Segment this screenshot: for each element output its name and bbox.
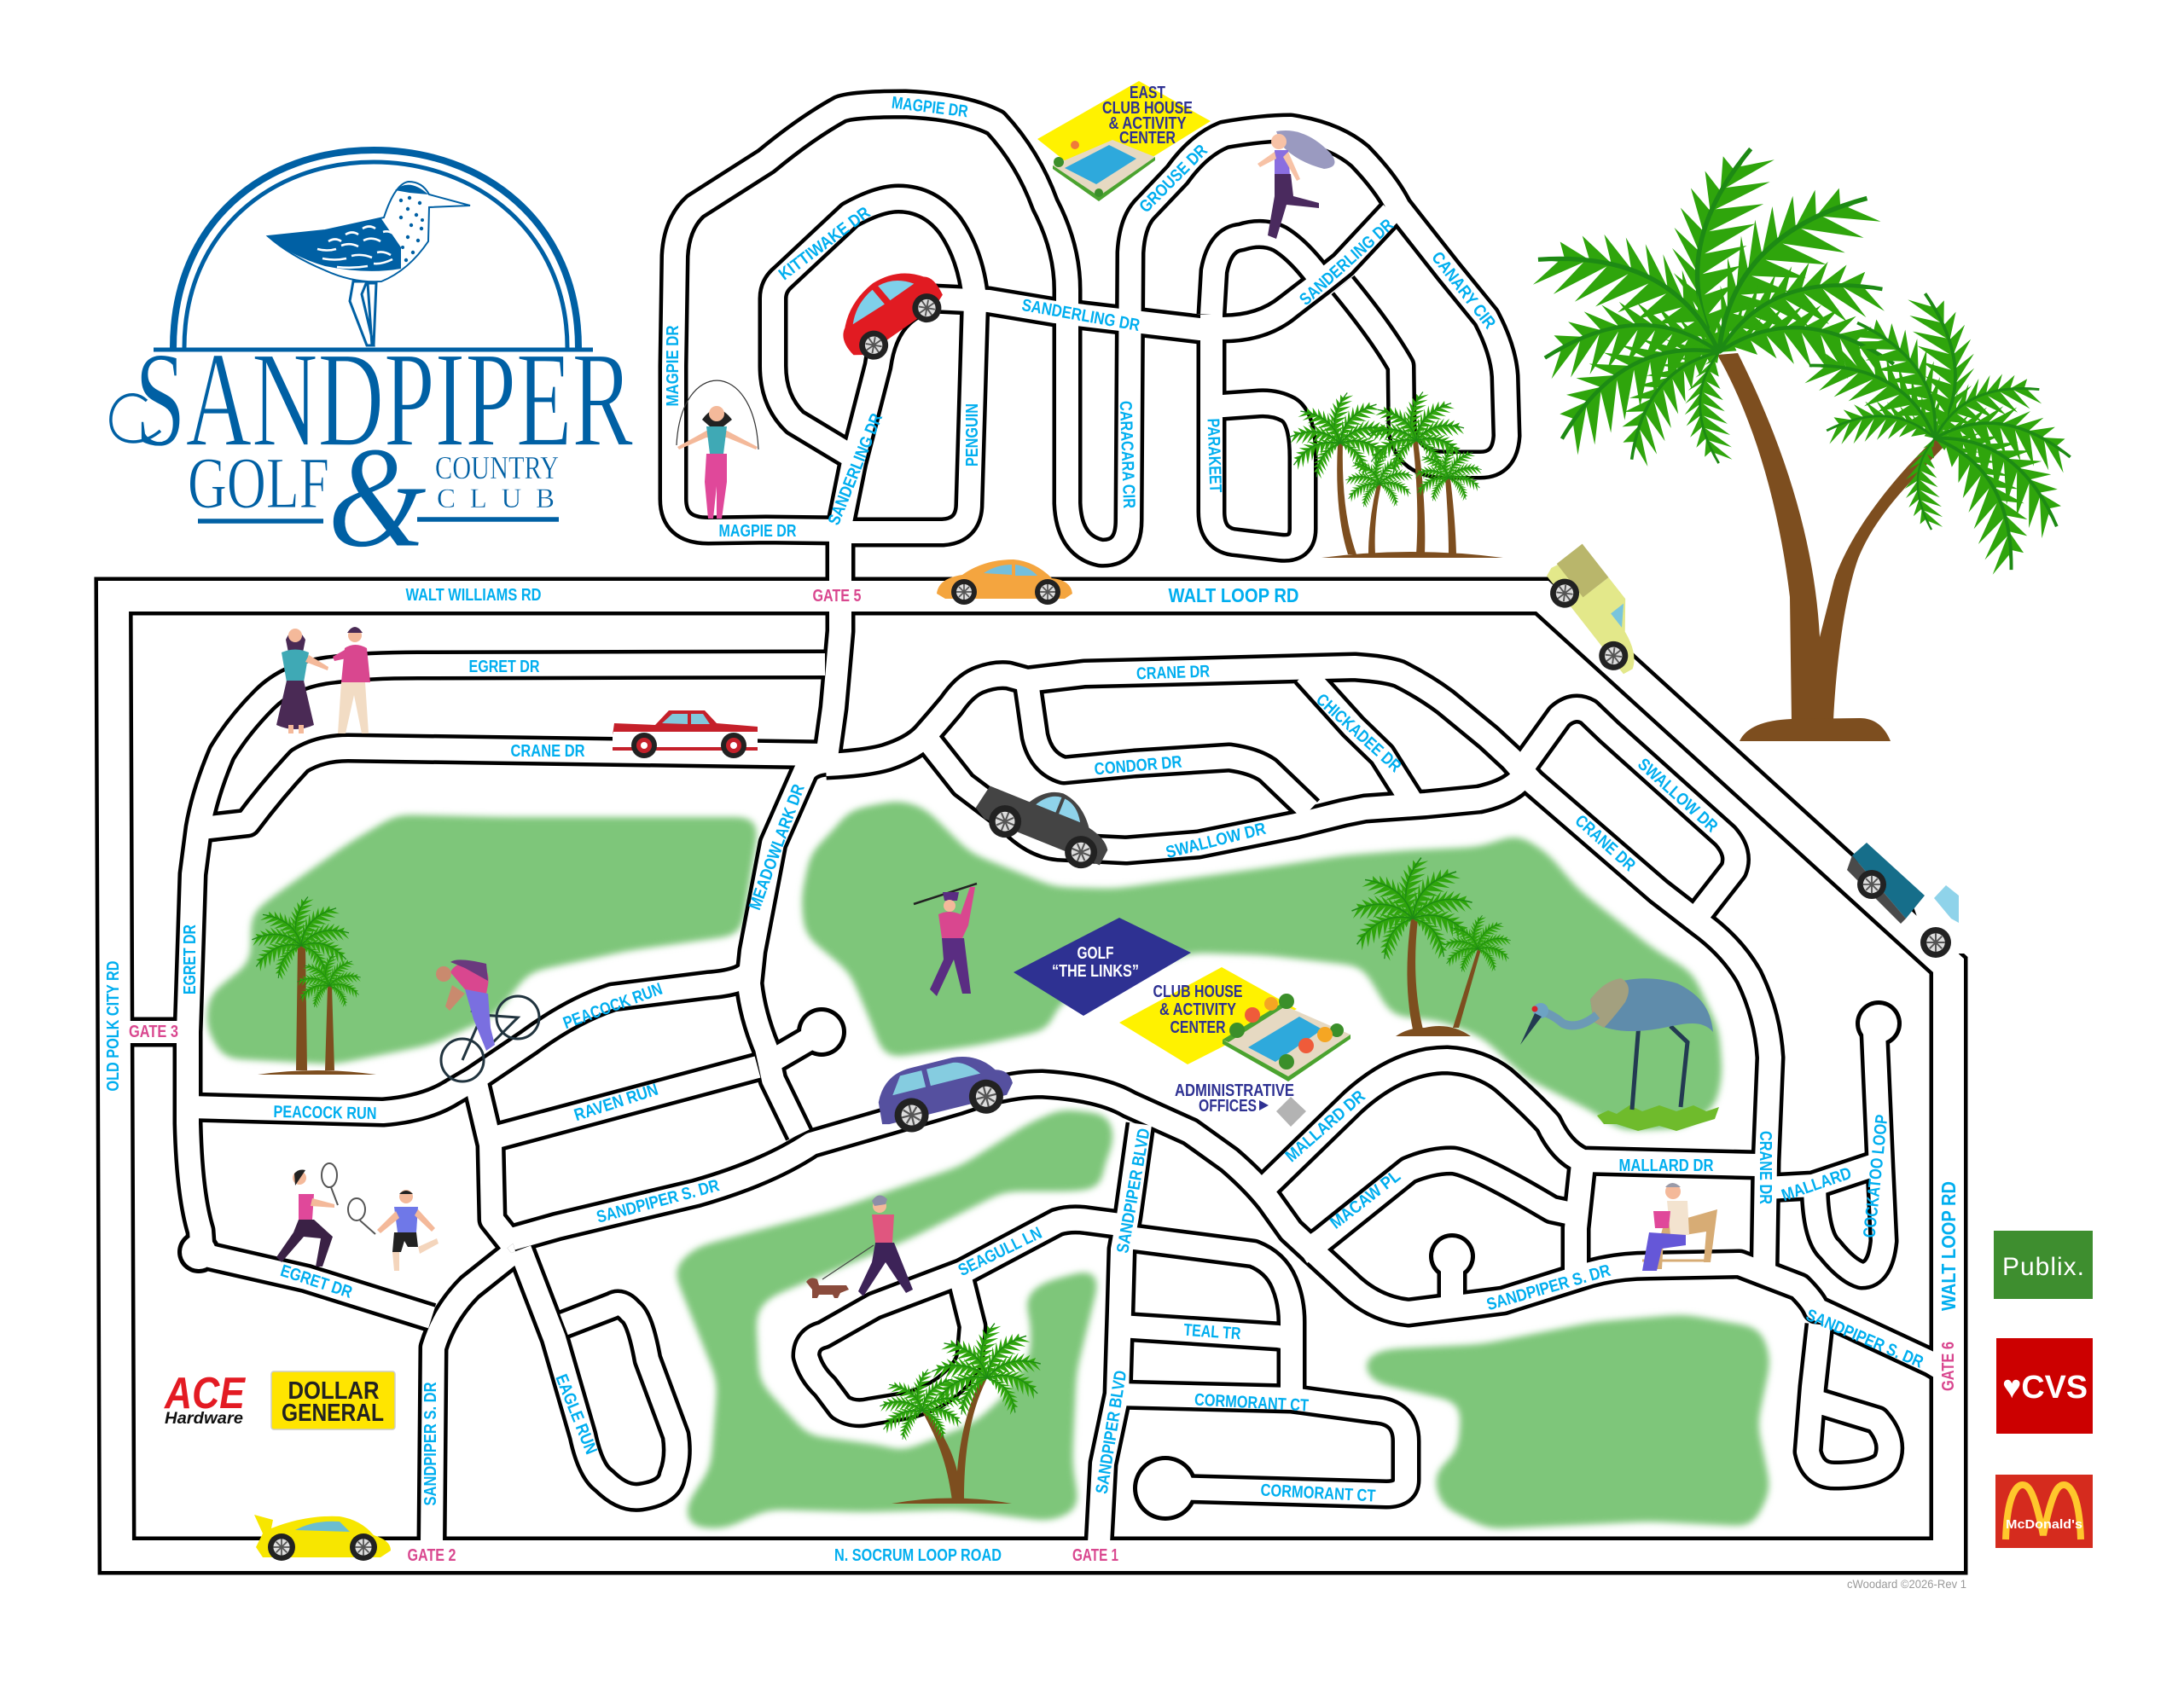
logo: Dollar General: GENERAL bbox=[282, 1400, 384, 1427]
east club house sign bbox=[1037, 81, 1211, 201]
pool bbox=[1223, 994, 1350, 1081]
logo: CVS bbox=[1996, 1338, 2093, 1434]
street labels: PEACOCK RUN bbox=[273, 1103, 377, 1123]
vehicle: red hatchback bbox=[826, 254, 953, 370]
street labels: SANDERLING DR bbox=[1296, 215, 1397, 310]
street labels: SWALLOW DR bbox=[1164, 820, 1269, 862]
palm mound bbox=[1740, 718, 1891, 741]
logo: CVS: ♥CVS bbox=[2002, 1370, 2088, 1406]
street labels: WALT LOOP RD bbox=[1937, 1181, 1960, 1311]
person: golfer bbox=[914, 884, 977, 996]
administrative offices: OFFICES bbox=[1199, 1097, 1257, 1116]
golf course green areas bbox=[206, 800, 1771, 1529]
street labels: SWALLOW DR bbox=[1634, 755, 1722, 837]
club house sign: CENTER bbox=[1170, 1018, 1226, 1037]
vehicle: orange car bbox=[937, 559, 1072, 605]
logo: Dollar General bbox=[271, 1371, 395, 1429]
street labels: EGRET DR bbox=[469, 658, 540, 676]
street labels: SANDPIPER S. DR bbox=[1484, 1261, 1613, 1314]
street labels: SANDERLING DR bbox=[1020, 296, 1141, 335]
street labels: GATE 5 bbox=[812, 587, 862, 606]
street labels: KITTIWAKE DR bbox=[775, 203, 874, 284]
palm pair east green bbox=[1350, 856, 1512, 1036]
street labels: COCKATOO LOOP bbox=[1860, 1114, 1892, 1238]
street labels: OLD POLK CITY RD bbox=[104, 960, 123, 1092]
administrative offices: ADMINISTRATIVE bbox=[1175, 1081, 1294, 1100]
street labels: GATE 3 bbox=[129, 1023, 178, 1041]
golf the links sign bbox=[1014, 918, 1191, 1016]
street labels: MACAW PL bbox=[1327, 1167, 1404, 1233]
east pool bbox=[1053, 140, 1155, 201]
street labels: MAGPIE DR bbox=[718, 522, 797, 541]
street labels: PENGUIN bbox=[963, 403, 982, 467]
street labels: EGRET DR bbox=[181, 925, 200, 994]
logo: McDonald's bbox=[1995, 1475, 2093, 1548]
street labels: CONDOR DR bbox=[1094, 753, 1183, 779]
person: cyclist bbox=[436, 959, 539, 1081]
street labels: PARAKEET bbox=[1203, 418, 1225, 493]
vehicle: yellow sports car bbox=[254, 1515, 391, 1561]
sandpiper bird bbox=[268, 182, 470, 345]
person: runner bbox=[1258, 130, 1334, 239]
large crown bbox=[1526, 142, 1895, 471]
club house text: CLUB HOUSE bbox=[1153, 983, 1242, 1001]
street labels: WALT LOOP RD bbox=[1169, 584, 1298, 606]
street labels: SANDPIPER S. DR bbox=[595, 1176, 722, 1227]
street labels: CHICKADEE DR bbox=[1312, 690, 1405, 776]
street labels: CRANE DR bbox=[1756, 1131, 1774, 1204]
big palm trees bbox=[1526, 142, 2083, 741]
street labels: WALT WILLIAMS RD bbox=[406, 586, 541, 605]
street labels: GATE 1 bbox=[1072, 1546, 1118, 1565]
vehicle: blue suv bbox=[871, 1045, 1019, 1139]
east club house sign: & ACTIVITY bbox=[1109, 114, 1187, 133]
east club house text: EAST bbox=[1130, 84, 1165, 102]
logo: Sandpiper Golf & Country Club: & bbox=[328, 417, 427, 577]
street labels bbox=[104, 94, 1960, 1565]
palm pair south green bbox=[878, 1322, 1043, 1504]
person reading on bench bbox=[1642, 1183, 1717, 1271]
people: badminton players bbox=[276, 1163, 439, 1271]
logo: Sandpiper Golf & Country Club: CLUB bbox=[437, 484, 555, 514]
logo: Sandpiper Golf & Country Club bbox=[111, 150, 633, 577]
vehicle: lime truck bbox=[1536, 544, 1662, 682]
street labels: SANDPIPER S. DR bbox=[421, 1382, 440, 1506]
logo: Publix: Publix. bbox=[2002, 1253, 2084, 1281]
street labels: PEACOCK RUN bbox=[561, 980, 665, 1033]
club house sign: & ACTIVITY bbox=[1159, 1000, 1237, 1019]
street labels: CRANE DR bbox=[1571, 811, 1639, 875]
street labels: SANDPIPER S. DR bbox=[1804, 1306, 1926, 1372]
logo: Sandpiper Golf & Country Club: GOLF bbox=[188, 442, 329, 524]
palm cluster north bbox=[1287, 391, 1503, 558]
second crown bbox=[1800, 293, 2083, 580]
street labels: CARACARA CIR bbox=[1116, 401, 1138, 509]
club house sign bbox=[1119, 967, 1350, 1081]
street labels: GATE 6 bbox=[1939, 1342, 1958, 1391]
street labels: CORMORANT CT bbox=[1260, 1481, 1376, 1506]
street labels: MALLARD DR bbox=[1619, 1157, 1714, 1175]
person: jump rope woman bbox=[677, 380, 758, 519]
street labels: SANDERLING DR bbox=[825, 410, 886, 528]
logo: Ace Hardware: Hardware bbox=[165, 1410, 243, 1428]
road network bbox=[113, 104, 1949, 1556]
vehicle: teal truck bbox=[1847, 843, 1979, 962]
vehicle: dark car bbox=[969, 765, 1121, 876]
person walking dog bbox=[806, 1195, 913, 1298]
palm pair west green bbox=[250, 896, 376, 1075]
logo: Dollar General: DOLLAR bbox=[288, 1377, 380, 1405]
east club house sign: CENTER bbox=[1119, 129, 1176, 148]
street labels: CRANE DR bbox=[1136, 662, 1211, 683]
logo: Sandpiper Golf & Country Club: COUNTRY bbox=[435, 450, 559, 486]
street labels: EAGLE RUN bbox=[551, 1371, 601, 1457]
street labels: EGRET DR bbox=[278, 1261, 355, 1302]
street labels: GATE 2 bbox=[408, 1546, 456, 1565]
street labels: SEAGULL LN bbox=[956, 1224, 1045, 1280]
sandhill crane bbox=[1520, 978, 1719, 1131]
logo wordmark: SANDPIPER bbox=[135, 323, 633, 475]
street labels: SANDPIPER BLVD bbox=[1093, 1369, 1130, 1495]
credit: cWoodard ©2026-Rev 1 bbox=[1847, 1577, 1966, 1591]
people: couple talking bbox=[276, 627, 370, 733]
street labels: SANDPIPER BLVD bbox=[1113, 1127, 1154, 1255]
east club house sign: CLUB HOUSE bbox=[1102, 99, 1193, 118]
crane grass bbox=[1597, 1105, 1719, 1131]
administrative offices bbox=[1175, 1081, 1306, 1127]
street labels: CRANE DR bbox=[510, 742, 585, 761]
vehicle: vintage red car bbox=[613, 709, 758, 758]
street labels: MAGPIE DR bbox=[891, 94, 969, 121]
street labels: CANARY CIR bbox=[1427, 248, 1499, 333]
street labels: CORMORANT CT bbox=[1194, 1391, 1309, 1415]
street labels: RAVEN RUN bbox=[572, 1081, 660, 1125]
street labels: MAGPIE DR bbox=[664, 325, 682, 406]
street labels: N. SOCRUM LOOP ROAD bbox=[834, 1546, 1002, 1565]
street labels: MALLARD bbox=[1780, 1164, 1854, 1205]
golf the links sign: GOLF bbox=[1077, 944, 1114, 963]
street labels: MALLARD DR bbox=[1282, 1087, 1369, 1166]
street labels: MEADOWLARK DR bbox=[746, 781, 809, 913]
logo: McDonald's: McDonald's bbox=[2006, 1517, 2082, 1532]
logo: Ace Hardware: ACE bbox=[163, 1369, 246, 1418]
logo arch bbox=[154, 150, 593, 350]
golf the links sign: “THE LINKS” bbox=[1052, 962, 1139, 981]
street labels: TEAL TR bbox=[1183, 1321, 1242, 1343]
palm trunks bbox=[1717, 353, 1945, 721]
street labels: GROUSE DR bbox=[1136, 141, 1211, 217]
logo: Publix bbox=[1994, 1231, 2093, 1299]
